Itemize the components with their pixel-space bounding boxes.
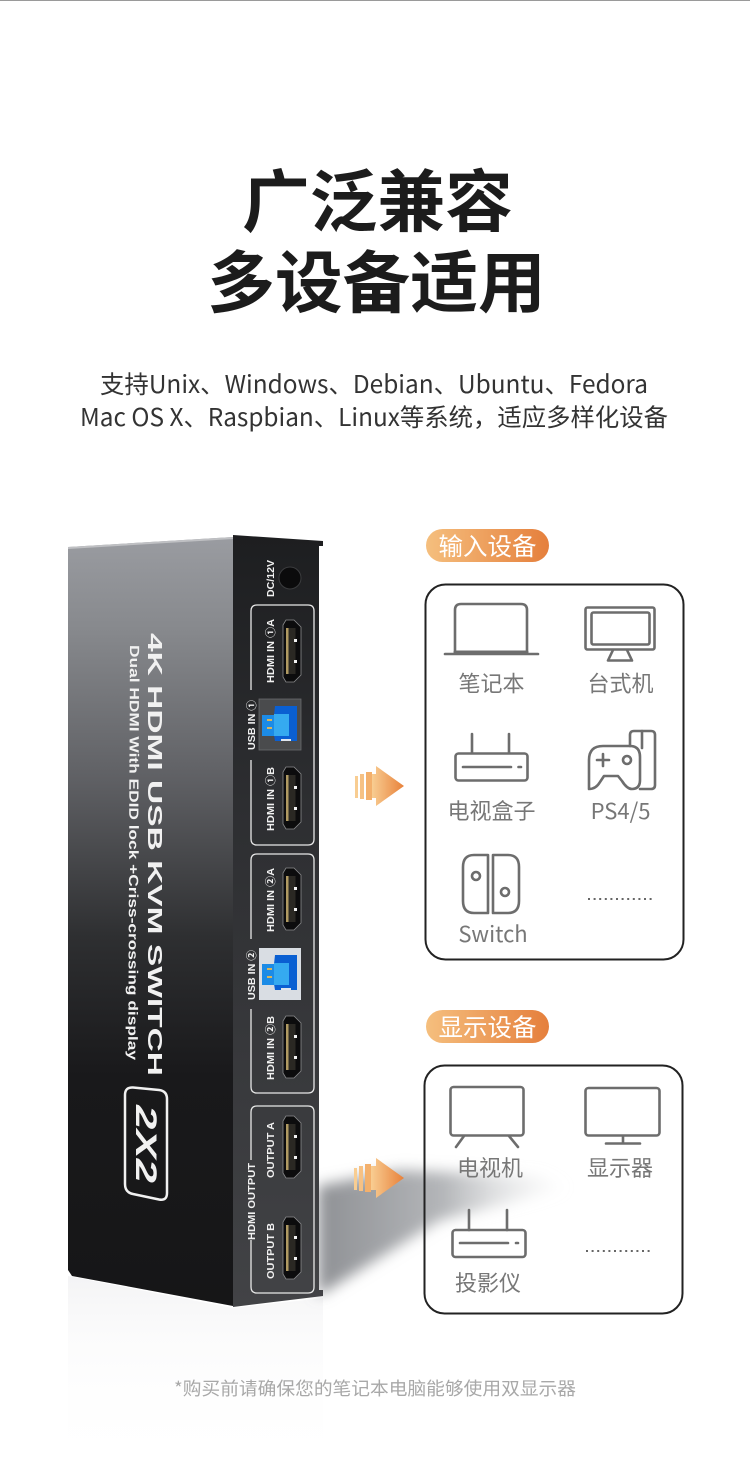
label: projector: 投影仪 — [455, 1266, 521, 1298]
label: desktop: 台式机 — [587, 666, 654, 698]
arrow: to input devices — [355, 766, 404, 806]
title: 广泛兼容 — [242, 148, 513, 246]
icon: laptop — [445, 604, 538, 654]
product: KVM switch — [68, 535, 323, 1307]
icon: television — [450, 1087, 524, 1147]
more dots — [586, 1250, 653, 1252]
HDMI port 2A — [265, 868, 301, 932]
device shadow — [318, 1170, 570, 1296]
subtitle — [80, 366, 668, 434]
2X2 badge: 2X2 — [129, 1104, 162, 1183]
label: laptop: 笔记本 — [458, 666, 525, 698]
HDMI output A: OUTPUT A — [265, 1122, 277, 1178]
HDMI port 1B: HDMI IN ①B — [265, 767, 277, 831]
subtitle: Mac OS X、Raspbian、Linux等系统，适应多样化设备 — [80, 399, 668, 434]
panel: display devices — [424, 1009, 682, 1314]
top border line — [0, 0, 750, 1]
HDMI port 1B — [265, 767, 301, 831]
label: monitor: 显示器 — [587, 1151, 653, 1183]
HDMI port 1A: HDMI IN ①A — [265, 619, 277, 683]
input pill: 输入设备 — [438, 528, 536, 563]
USB port 2: USB IN ② — [246, 950, 258, 1000]
subtitle: 支持Unix、Windows、Debian、Ubuntu、Fedora — [100, 366, 648, 401]
DC jack: DC/12V — [265, 560, 277, 597]
title — [207, 148, 546, 327]
display pill: 显示设备 — [438, 1009, 536, 1044]
HDMI port 2B — [265, 1016, 301, 1080]
HDMI output A — [265, 1116, 301, 1178]
USB port 1: USB IN ① — [246, 700, 258, 750]
more dots — [588, 898, 655, 900]
display panel frame — [424, 1066, 682, 1314]
DC jack — [265, 560, 301, 597]
port group outlines — [251, 605, 314, 1293]
side text sub: Dual HDMI With EDID lock +Criss-crossing display — [125, 645, 142, 1061]
2X2 badge — [125, 1087, 167, 1200]
icon: monitor — [586, 1088, 660, 1144]
HDMI output B: OUTPUT B — [265, 1223, 277, 1279]
device reflection — [68, 1276, 323, 1477]
USB port 1 — [246, 699, 301, 750]
icon: desktop — [586, 608, 654, 660]
side text main: 4K HDMI USB KVM SWITCH — [143, 633, 166, 1076]
HDMI port 2B: HDMI IN ②B — [265, 1016, 277, 1080]
label: tv box: 电视盒子 — [447, 794, 536, 826]
panel: input devices — [426, 528, 684, 960]
arrow: to display devices — [354, 1158, 404, 1198]
title: 多设备适用 — [207, 229, 546, 327]
icon: projector — [452, 1210, 526, 1257]
USB port 2 — [246, 948, 301, 1000]
device front face — [233, 535, 323, 1307]
icon: Switch console — [463, 855, 519, 913]
label: television: 电视机 — [457, 1151, 523, 1183]
input panel frame — [426, 584, 684, 960]
HDMI output B — [265, 1217, 301, 1279]
label: PS4/5: PS4/5 — [591, 794, 650, 826]
icon: tv box — [456, 734, 528, 780]
HDMI port 2A: HDMI IN ②A — [265, 868, 277, 932]
device side face — [68, 537, 233, 1306]
HDMI output label: HDMI OUTPUT — [246, 1162, 258, 1240]
icon: game controller — [589, 731, 655, 789]
HDMI port 1A — [265, 619, 301, 683]
label: Switch: Switch — [458, 917, 528, 949]
footnote: *购买前请确保您的笔记本电脑能够使用双显示器 — [174, 1375, 576, 1401]
